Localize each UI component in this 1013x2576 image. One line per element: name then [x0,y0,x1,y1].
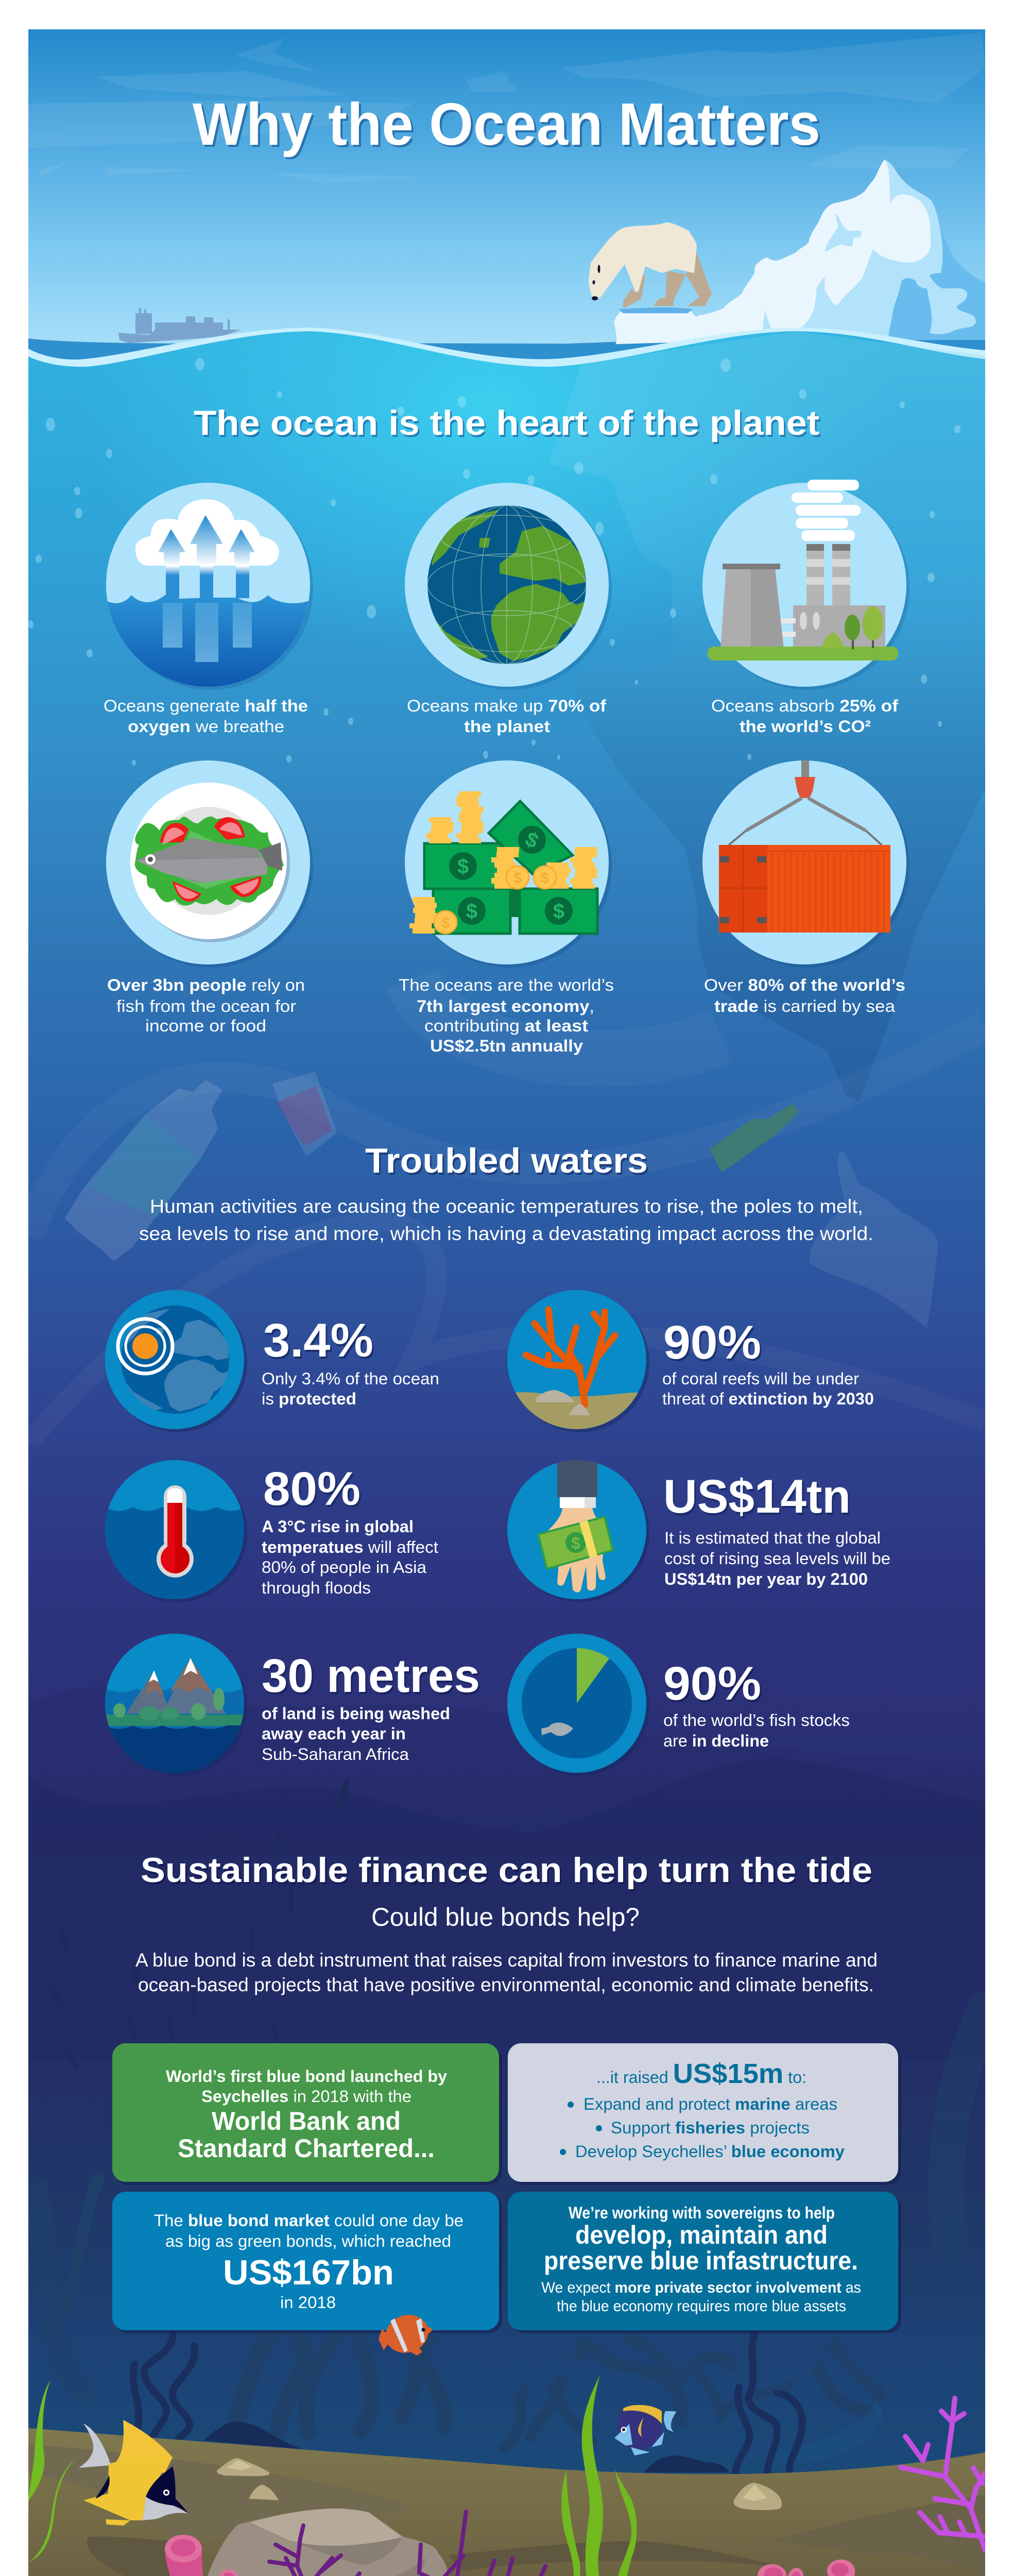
caption: economy: US$2.5tn annually [430,1037,583,1055]
card: blue bond market: as big as green bonds, which reached [165,2232,451,2250]
card: first blue bond: World’s first blue bond launched by [166,2067,447,2086]
icon: money and coins [409,791,597,934]
stat icon: eroding island [105,1634,247,1777]
drinks can [272,1072,337,1157]
far hills [28,1758,985,2061]
stat text: 30 metres [262,1704,450,1764]
icon: money and coins: $ [466,900,477,923]
card: sovereigns: develop, maintain and [575,2221,828,2249]
caption: economy: The oceans are the world’s [399,976,614,994]
panel: planet [405,483,612,690]
intro: blue bonds [135,1950,878,1995]
icon: fish on a plate [130,783,290,942]
distant mound [767,2401,882,2464]
pink tubes left [141,2535,238,2576]
caption: planet: Oceans make up 70% of [407,697,606,715]
card: first blue bond: Seychelles in 2018 with the [201,2087,411,2106]
panel: trade [702,760,909,968]
icon: money and coins: $ [457,855,469,878]
icon: money and coins: $ [522,827,542,853]
card: raised US$15m: Support fisheries projects [611,2119,810,2137]
stat: 90% fish: 90% [663,1657,761,1710]
icon: shipping container [719,760,890,933]
heading: sustainable finance: Sustainable finance can help turn the tide [141,1851,872,1890]
caption: trade [704,976,905,1015]
caption: oxygen: oxygen we breathe [128,717,284,736]
card: sovereigns [508,2192,901,2333]
caption: oxygen [104,697,308,736]
caption: fish: income or food [145,1016,266,1035]
card: sovereigns: preserve blue infastructure. [544,2246,858,2275]
rock [203,2509,449,2576]
stat text: fish [663,1711,850,1750]
card: raised US$15m: Expand and protect marine areas [583,2095,837,2113]
caption: trade: trade is carried by sea [714,997,895,1015]
panel: fish [106,760,313,968]
stat text: US$14tn: US$14tn per year by 2100 [664,1570,868,1588]
card: raised US$15m: Develop Seychelles’ blue economy [575,2142,845,2161]
deep kelp silhouettes [36,2009,985,2447]
card: first blue bond: Standard Chartered... [178,2134,435,2163]
clouds [28,32,985,183]
intro: blue bonds: A blue bond is a debt instrument that raises capital from investors to finance marine and [135,1950,878,1971]
plastic bottle [65,1080,222,1261]
stat: 80%: 80% [263,1463,360,1515]
stat text: 80%: through floods [262,1579,371,1597]
caption: economy [399,976,614,1055]
bubbles [28,358,960,766]
pebbles [217,2458,782,2510]
stat text: 3.4% [262,1369,439,1408]
heading: ocean heart: The ocean is the heart of the planet [194,403,819,443]
stat text: US$14tn [664,1529,890,1588]
stat: 90% coral: 90% [663,1316,761,1369]
caption: oxygen: Oceans generate half the [104,697,308,715]
icon: money and coins: $ [541,870,550,887]
stat text: fish: of the world’s fish stocks [663,1711,850,1730]
stat text: US$14tn: It is estimated that the global [664,1529,881,1547]
card: raised US$15m [508,2043,901,2185]
caption: fish [107,976,305,1035]
caption: trade: Over 80% of the world’s [704,976,905,994]
water bands [28,979,985,1443]
ship silhouette [118,308,241,343]
sky [28,29,985,349]
panel: CO2 [702,480,909,690]
intro: blue bonds: ocean-based projects that have positive environmental, economic and climate benefits. [138,1974,874,1995]
card: sovereigns: We expect more private sector involvement as [541,2279,861,2296]
stat text: 30 metres: Sub-Saharan Africa [262,1745,409,1764]
stat text: 3.4%: is protected [262,1389,356,1408]
seabed [28,2428,985,2576]
distant water [28,334,985,376]
fish shoal [46,1777,351,2071]
subheading: Could blue bonds help? [371,1903,640,1931]
stat icon: coral [507,1290,649,1432]
polar bear [589,222,712,308]
stat text: US$14tn: cost of rising sea levels will be [664,1549,890,1568]
stat: US$14tn: US$14tn [663,1470,851,1523]
blue tang fish [614,2405,676,2455]
stat: 3.4%: 3.4% [263,1314,373,1367]
stat icon: protected ocean [105,1290,247,1432]
icon: money and coins: $ [441,914,450,931]
clown fish [379,2309,434,2359]
caption: CO2 line 2: the world’s CO² [740,717,871,736]
card: raised US$15m: ...it raised US$15m to: [596,2058,806,2089]
stat text: coral: of coral reefs will be under [662,1369,859,1388]
card: blue bond market [112,2192,502,2333]
caption: economy: contributing at least [424,1016,588,1035]
card: sovereigns: We’re working with sovereigns to help [569,2204,835,2222]
seabed hills [28,1687,985,1855]
stat: 30 metres: 30 metres [262,1650,480,1702]
icon: factory [708,480,898,660]
stat icon: fish stocks pie [507,1634,649,1776]
card: blue bond market: in 2018 [280,2293,336,2312]
stat text: 80%: A 3°C rise in global [262,1517,414,1536]
yellow fish [79,2420,188,2526]
wave rim [28,328,985,381]
magenta coral [901,2398,985,2550]
card: blue bond market: The blue bond market could one day be [154,2211,463,2230]
water glow [28,331,985,773]
pink tubes right [744,2560,889,2576]
caption: CO2: Oceans absorb 25% of [711,697,898,715]
intro: troubled waters: sea levels to rise and more, which is having a devastating impact across the world. [139,1223,873,1244]
icon: oxygen water and cloud [103,499,314,690]
card: sovereigns: the blue economy requires more blue assets [557,2298,846,2315]
stat icon: hand with money [507,1458,649,1602]
caption: planet line 2: the planet [464,717,550,736]
stat icon: hand with money: $ [571,1534,580,1552]
stat text: 80%: temperatues will affect [262,1538,438,1556]
iceberg [614,160,985,344]
stat text: coral [662,1369,874,1408]
glass bottle [710,1104,799,1173]
stat text: fish: are in decline [663,1732,769,1750]
card: first blue bond [112,2043,502,2185]
dark kelp [133,2332,802,2474]
stat text: 80%: 80% of people in Asia [262,1558,426,1577]
underwater iceberg [549,331,985,1102]
panel: economy [405,760,612,968]
icon: money and coins: $ [553,900,564,923]
plastic bag [810,1150,938,1328]
stat icon: thermometer [105,1460,247,1602]
intro: troubled waters: Human activities are causing the oceanic temperatures to rise, the poles to melt, [150,1196,863,1217]
panel: oxygen [103,483,314,690]
caption: fish: fish from the ocean for [116,997,296,1015]
stat text: 30 metres: of land is being washed [262,1704,450,1723]
stat text: 3.4%: Only 3.4% of the ocean [262,1369,439,1388]
title: Why the Ocean Matters [193,91,820,158]
icon: money and coins: $ [513,870,522,887]
stat text: 80% [262,1517,438,1597]
stat text: 30 metres: away each year in [262,1724,406,1743]
caption: economy: 7th largest economy , [417,997,594,1015]
card: blue bond market: US$167bn [223,2253,394,2292]
card: first blue bond: World Bank and [212,2107,401,2136]
purple coral [269,2512,554,2576]
green seaweed left [26,2380,77,2563]
caption: fish: Over 3bn people rely on [107,976,305,994]
icon: globe [427,505,586,664]
intro: troubled waters [139,1196,873,1244]
stat text: coral: threat of extinction by 2030 [662,1389,874,1408]
sand shadows [28,2445,985,2576]
heading: troubled waters: Troubled waters [365,1141,648,1180]
green seaweed centre [558,2375,637,2576]
